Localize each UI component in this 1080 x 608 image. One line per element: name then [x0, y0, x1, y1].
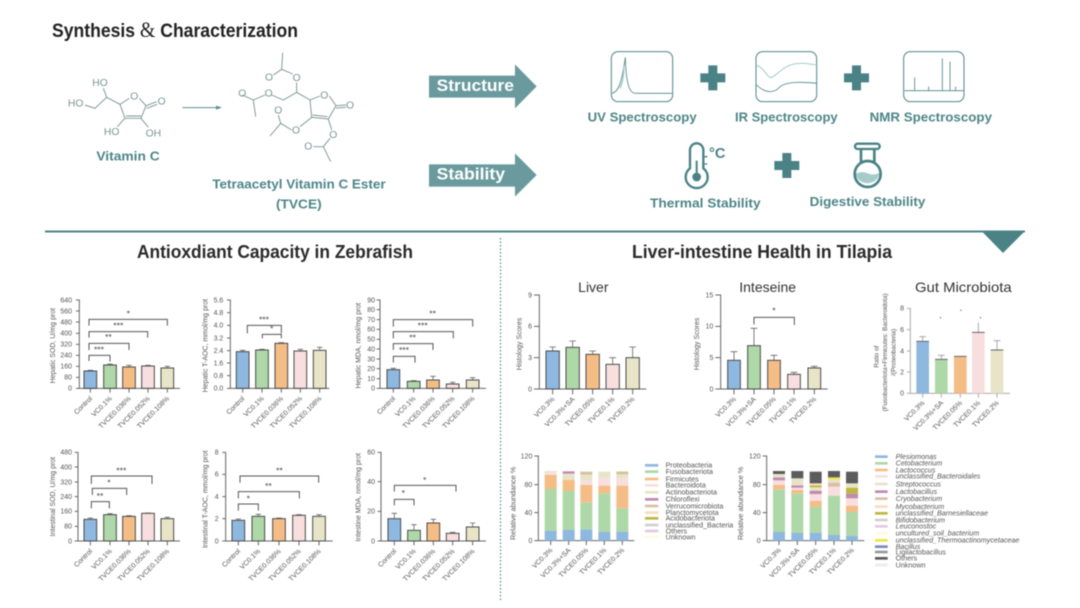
chart: genus relative abundance: 40: [753, 510, 761, 517]
icon: thermometer: °C: [709, 146, 726, 162]
legend: genus: Bacillus: [896, 543, 921, 551]
molecule: vitamin C: O: [158, 96, 166, 107]
chart: hepatic SOD: *: [127, 308, 131, 318]
chart: intestinal SOD: **: [97, 491, 104, 501]
panel: synthesis: [68, 53, 537, 211]
chart title: intestine: Inteseine: [739, 279, 796, 295]
chart: intestinal T-AOC: 0: [215, 538, 219, 545]
chart: hepatic MDA: TVCE0.036%: [402, 395, 437, 430]
chart: hepatic T-AOC: 5.6: [214, 297, 223, 304]
legend: phylum: [645, 462, 733, 541]
molecule: vitamin C: OH: [146, 129, 161, 140]
label: IR spectroscopy: IR Spectroscopy: [735, 109, 838, 124]
chart: phylum relative abundance: VC0.3%: [531, 547, 554, 570]
chart: gut microbiota ratio: (Fusobacteriota+Firmicutes: Bacteroidota): [882, 293, 889, 411]
chart: hepatic SOD: Control: [73, 395, 94, 416]
chart: hepatic SOD: 160: [60, 364, 72, 371]
label: NMR spectroscopy: NMR Spectroscopy: [870, 109, 993, 124]
legend: phylum: Proteobacteria: [666, 462, 712, 470]
chart: phylum relative abundance: Relative abundance %: [509, 466, 518, 540]
chart: genus relative abundance: 120: [749, 453, 761, 460]
panel: hepatic charts: [50, 297, 486, 430]
legend: genus: unclassified_Barnesiellaceae: [896, 510, 988, 518]
icon: thermometer: [686, 143, 726, 188]
panel: characterization methods: [588, 52, 993, 210]
icon: UV spectrum: [611, 52, 673, 102]
chart: intestinal SOD: Control: [73, 548, 94, 569]
chart: intestine MDA: 20: [367, 509, 375, 516]
icon: plus: [700, 65, 725, 90]
chart: hepatic SOD: ***: [94, 344, 105, 354]
chart: gut microbiota ratio: 0: [900, 391, 904, 398]
chart: hepatic MDA: Hepatic MDA, nmol/mg prot: [356, 303, 363, 389]
legend: genus: unclassified_Thermoactinomycetaceae: [896, 537, 1019, 545]
chart: hepatic MDA: Control: [376, 395, 397, 416]
chart: intestinal SOD: 400: [60, 464, 72, 471]
legend: phylum: Chloroflexi: [666, 496, 700, 504]
chart: hepatic MDA: TVCE0.108%: [442, 395, 476, 430]
legend: phylum: Fusobacteriota: [666, 468, 713, 476]
chart: intestinal T-AOC: **: [276, 465, 283, 475]
chart: hepatic T-AOC: ***: [259, 314, 270, 324]
chart: liver histology: [517, 292, 646, 429]
chart: hepatic SOD: 560: [60, 308, 72, 315]
legend: genus: Leuconostoc: [896, 523, 937, 531]
chart: liver histology: 9: [528, 292, 532, 299]
icon: IR spectrum: [756, 52, 817, 102]
chart: gut microbiota ratio: Ratio of: [873, 346, 880, 368]
molecule: TVCE: O: [265, 73, 273, 84]
chart: genus relative abundance: 80: [753, 482, 761, 489]
legend: phylum: Planctomycetota: [666, 509, 719, 517]
chart: hepatic SOD: 480: [60, 319, 72, 326]
chart: intestinal SOD: 320: [60, 479, 72, 486]
chart: hepatic MDA: 20: [367, 366, 375, 373]
chart: intestinal T-AOC: Control: [221, 548, 242, 569]
legend: phylum: Acidobacteriota: [666, 515, 715, 523]
chart: genus relative abundance: TVCE0.2%: [826, 547, 856, 577]
chart: intestinal T-AOC: TVCE0.108%: [288, 548, 323, 583]
chart: intestine MDA: 60: [367, 450, 375, 457]
chart: phylum relative abundance: TVCE0.1%: [579, 547, 608, 577]
chart: liver histology: 0: [528, 386, 532, 393]
chart: intestinal T-AOC: 6: [215, 472, 219, 479]
molecule: TVCE: O: [320, 90, 328, 101]
molecule: vitamin C: [68, 78, 166, 140]
chart: hepatic MDA: 0: [371, 386, 375, 393]
title: Synthesis & Characterization: [52, 17, 298, 42]
molecule: TVCE: O: [265, 89, 273, 100]
chart: intestinal T-AOC: TVCE0.036%: [248, 548, 283, 583]
molecule: TVCE: O: [293, 73, 301, 84]
legend: genus: Cryobacterium: [896, 495, 942, 503]
heading: tilapia: Liver-intestine Health in Tilapia: [632, 241, 893, 262]
label: TVCE: (TVCE): [276, 196, 322, 211]
chart: gut microbiota ratio: TVCE0.1%: [953, 400, 982, 429]
chart: intestine MDA: Control: [377, 548, 398, 569]
chart: hepatic SOD: 0: [68, 386, 72, 393]
chart: hepatic T-AOC: 3.2: [214, 335, 223, 342]
molecule: vitamin C: HO: [68, 99, 83, 110]
chart: hepatic MDA: TVCE0.052%: [422, 395, 456, 430]
icon: flask: [855, 144, 881, 187]
panel: intestinal charts: [50, 450, 486, 583]
legend: genus: Lactococcus: [896, 466, 936, 474]
chart: hepatic SOD: 240: [60, 353, 72, 360]
chart: intestine histology: 5: [709, 355, 713, 362]
molecule: vitamin C: HO: [104, 127, 119, 138]
chart: intestinal T-AOC: 2: [215, 516, 219, 523]
legend: phylum: Firmicutes: [666, 475, 699, 483]
chart: hepatic MDA: 70: [367, 317, 375, 324]
chart: intestinal SOD: 80: [64, 524, 72, 531]
chart: hepatic MDA: ***: [418, 320, 428, 330]
chart: phylum relative abundance: TVCE0.2%: [597, 547, 626, 577]
chart: intestine MDA: *: [402, 488, 406, 498]
label: thermal stability: Thermal Stability: [650, 195, 761, 210]
chart: intestinal SOD: 0: [68, 538, 72, 545]
chart: intestine MDA: *: [423, 475, 427, 485]
legend: genus: Lactobacillus: [896, 488, 937, 496]
panel: histology and ratio charts: [517, 279, 1012, 432]
molecule: TVCE: O: [292, 126, 300, 137]
chart: phylum relative abundance: [509, 453, 733, 580]
chart: intestinal T-AOC: **: [265, 481, 272, 491]
chart: intestinal SOD: ***: [116, 465, 127, 475]
molecule: TVCE: O: [304, 141, 312, 152]
legend: genus: uncultured_soil_bacterium: [896, 530, 979, 538]
chart: intestine histology: *: [772, 305, 776, 315]
chart: hepatic SOD: TVCE0.036%: [98, 395, 133, 430]
chart: intestinal T-AOC: 8: [215, 450, 219, 457]
chart: hepatic SOD: 640: [60, 297, 72, 304]
chart: genus relative abundance: 0: [757, 538, 761, 545]
chart: intestine histology: TVCE0.1%: [768, 396, 798, 426]
chart: intestine histology: 0: [709, 386, 713, 393]
chart: hepatic SOD: Hepatic SOD, U/mg prot: [50, 308, 57, 383]
label: TVCE: [212, 176, 386, 211]
chart: genus relative abundance: VC0.3%: [760, 547, 783, 570]
arrow: structure: [429, 64, 537, 108]
chart: hepatic MDA: VC0.1%: [394, 395, 417, 419]
chart: hepatic MDA: 10: [367, 376, 375, 383]
label: TVCE: Tetraacetyl Vitamin C Ester: [212, 176, 386, 191]
icon: plus: [774, 153, 799, 178]
chart: intestine MDA: 0: [371, 538, 375, 545]
chart: intestinal SOD: TVCE0.036%: [98, 548, 133, 583]
chart: gut microbiota ratio: 8: [900, 306, 904, 313]
chart: hepatic SOD: 80: [64, 375, 72, 382]
chart: gut microbiota ratio: TVCE0.2%: [971, 400, 1001, 429]
chart: intestinal SOD: 480: [60, 450, 72, 457]
chart: hepatic T-AOC: [202, 297, 329, 430]
chart: hepatic SOD: TVCE0.052%: [117, 395, 152, 430]
chart: intestine histology: TVCE0.2%: [789, 396, 818, 426]
chart: hepatic T-AOC: 4.0: [214, 323, 223, 330]
arrow: structure: Structure: [437, 76, 514, 95]
chart title: gut microbiota: Gut Microbiota: [915, 279, 1012, 295]
chart: gut microbiota ratio: 2: [900, 369, 904, 376]
icon: NMR spectrum: [904, 52, 964, 102]
chart: phylum relative abundance: VC0.3%+SA: [540, 547, 573, 580]
chart: hepatic SOD: ***: [113, 320, 124, 330]
legend: genus: [875, 453, 1019, 569]
chart: intestine histology: Histology Scores: [694, 317, 701, 370]
chart: intestine MDA: TVCE0.036%: [402, 548, 437, 583]
molecule: vitamin C: O: [130, 91, 138, 102]
chart: intestinal T-AOC: Intestinal T-AOC, mmol/mg prot: [202, 450, 209, 548]
legend: genus: Cetobacterium: [896, 460, 942, 468]
chart: intestinal SOD: TVCE0.052%: [117, 548, 152, 583]
chart: intestine histology: 15: [706, 292, 713, 299]
chart: genus relative abundance: TVCE0.05%: [787, 547, 819, 579]
chart: intestine MDA: TVCE0.052%: [422, 548, 456, 583]
chart: hepatic MDA: 90: [367, 297, 375, 304]
chart: phylum relative abundance: TVCE0.05%: [558, 547, 590, 579]
arrow: reaction: [182, 106, 222, 110]
chart: intestinal SOD: VC0.1%: [91, 548, 114, 571]
chart: intestine histology: TVCE0.05%: [746, 396, 778, 428]
chart: intestinal T-AOC: [202, 450, 333, 583]
chart: gut microbiota ratio: VC0.3%: [903, 400, 926, 423]
chart: liver histology: TVCE0.1%: [587, 396, 616, 426]
legend: genus: Plesiomonas: [896, 453, 937, 461]
chart: hepatic SOD: 400: [60, 331, 72, 338]
chart: phylum relative abundance: 0: [528, 538, 532, 545]
chart: hepatic MDA: 30: [367, 356, 375, 363]
chart: hepatic T-AOC: TVCE0.036%: [250, 395, 285, 430]
chart: intestinal T-AOC: 4: [215, 494, 219, 501]
chart: hepatic MDA: ***: [399, 345, 410, 355]
chart: gut microbiota ratio: 4: [900, 348, 904, 355]
legend: phylum: Unknown: [666, 533, 696, 541]
chart: intestine MDA: [356, 450, 486, 583]
legend: genus: unclassified_Bacteroidales: [896, 473, 981, 481]
chart: intestinal SOD: Intestinal SOD, U/mg prot: [50, 457, 57, 536]
label: vitamin C: Vitamin C: [96, 149, 160, 164]
legend: genus: Unknown: [896, 561, 926, 569]
chart: genus relative abundance: Relative abundance %: [736, 466, 745, 540]
chart: intestine histology: 10: [706, 324, 713, 331]
chart: intestine MDA: VC0.1%: [395, 548, 418, 571]
chart: intestinal SOD: TVCE0.108%: [136, 548, 171, 583]
molecule: TVCE: O: [274, 105, 282, 116]
chart: intestine histology: VC0.3%: [715, 396, 738, 419]
chart: intestinal T-AOC: VC0.1%: [239, 548, 262, 571]
chart: hepatic T-AOC: *: [270, 324, 274, 334]
chart: intestinal SOD: 240: [60, 494, 72, 501]
chart: hepatic SOD: [50, 297, 180, 430]
chart: genus relative abundance: [736, 453, 1019, 580]
chart title: liver: Liver: [578, 279, 609, 295]
molecule: vitamin C: HO: [92, 78, 108, 89]
chart: hepatic MDA: 40: [367, 346, 375, 353]
chart: hepatic T-AOC: TVCE0.052%: [269, 395, 304, 430]
chart: liver histology: VC0.3%: [533, 396, 556, 419]
legend: genus: Others: [896, 555, 918, 563]
chart: intestine MDA: TVCE0.108%: [442, 548, 476, 583]
legend: genus: Bifidobacterium: [896, 516, 945, 524]
chart: intestinal T-AOC: TVCE0.052%: [268, 548, 303, 583]
legend: phylum: Bacteroidota: [666, 482, 706, 490]
molecule: TVCE: O: [238, 89, 246, 100]
chart: phylum relative abundance: 40: [525, 510, 532, 517]
chart: hepatic MDA: 60: [367, 327, 375, 334]
chart: liver histology: VC0.3%+SA: [544, 396, 577, 429]
chart: hepatic SOD: **: [105, 332, 112, 342]
chart: intestinal SOD: [50, 450, 180, 583]
legend: genus: Ligilactobacillus: [896, 548, 946, 556]
chart: phylum relative abundance: 80: [525, 482, 532, 489]
label: digestive stability: Digestive Stability: [810, 194, 926, 209]
molecule: TVCE: O: [329, 130, 337, 141]
legend: genus: Mycobacterium: [896, 503, 944, 511]
chart: hepatic T-AOC: Hepatic T-AOC, mmol/mg prot: [202, 299, 209, 392]
chart: liver histology: 3: [528, 355, 532, 362]
chart: hepatic SOD: TVCE0.108%: [136, 395, 171, 430]
chart: intestine MDA: Intestine MDA, nmol/mg prot: [356, 453, 363, 542]
label: UV spectroscopy: UV Spectroscopy: [588, 109, 697, 124]
legend: phylum: Others: [666, 527, 688, 535]
legend: phylum: Verrucomicrobiota: [666, 502, 723, 510]
chart: hepatic MDA: **: [429, 309, 437, 319]
chart: hepatic T-AOC: Control: [226, 395, 247, 416]
chart: hepatic T-AOC: 4.8: [214, 310, 223, 317]
legend: genus: Streptococcus: [896, 480, 941, 488]
chart: liver histology: TVCE0.2%: [607, 396, 636, 426]
chart: intestinal T-AOC: *: [247, 493, 251, 503]
chart: gut microbiota ratio: /(Proteobacteria): [890, 329, 897, 376]
chart: genus relative abundance: VC0.3%+SA: [769, 547, 801, 580]
chart: liver histology: Histology Scores: [517, 317, 524, 370]
chart: gut microbiota ratio: 6: [900, 327, 904, 334]
icon: plus: [844, 65, 869, 90]
chart: intestine histology: [694, 292, 828, 429]
icon: section triangle: [982, 231, 1025, 253]
legend: phylum: unclassified_Bacteria: [666, 521, 733, 529]
chart: hepatic MDA: 50: [367, 337, 375, 344]
chart: intestine MDA: 40: [367, 479, 375, 486]
chart: hepatic T-AOC: 1.6: [214, 360, 223, 367]
molecule: TVCE: [238, 53, 354, 162]
chart: intestinal SOD: 160: [60, 509, 72, 516]
chart: phylum relative abundance: 120: [521, 453, 532, 460]
chart: genus relative abundance: TVCE0.1%: [808, 547, 838, 577]
chart: gut microbiota ratio: TVCE0.05%: [932, 400, 964, 432]
chart: gut microbiota ratio: VC0.3%+SA: [913, 400, 945, 432]
chart: hepatic T-AOC: 2.4: [214, 348, 223, 355]
chart: hepatic MDA: [356, 297, 486, 430]
chart: hepatic T-AOC: 0.0: [214, 386, 223, 393]
molecule: TVCE: O: [346, 100, 354, 111]
chart: hepatic T-AOC: 0.8: [214, 373, 223, 380]
arrow: stability: Stability: [437, 164, 506, 183]
chart: hepatic MDA: **: [409, 333, 417, 343]
chart: hepatic SOD: VC0.1%: [91, 395, 114, 419]
legend: phylum: Actinobacteriota: [666, 489, 717, 497]
chart: gut microbiota ratio: [873, 293, 1010, 432]
arrow: stability: [429, 153, 537, 197]
chart: hepatic T-AOC: TVCE0.108%: [289, 395, 323, 430]
chart: intestinal SOD: *: [107, 477, 111, 487]
chart: liver histology: TVCE0.05%: [564, 396, 596, 428]
heading: zebrafish: Antioxdiant Capacity in Zebrafish: [137, 241, 413, 262]
chart: hepatic T-AOC: VC0.1%: [243, 395, 266, 419]
chart: liver histology: 6: [528, 324, 532, 331]
chart: hepatic MDA: 80: [367, 307, 375, 314]
chart: hepatic SOD: 320: [60, 342, 72, 349]
chart: intestine histology: VC0.3%+SA: [725, 396, 758, 429]
